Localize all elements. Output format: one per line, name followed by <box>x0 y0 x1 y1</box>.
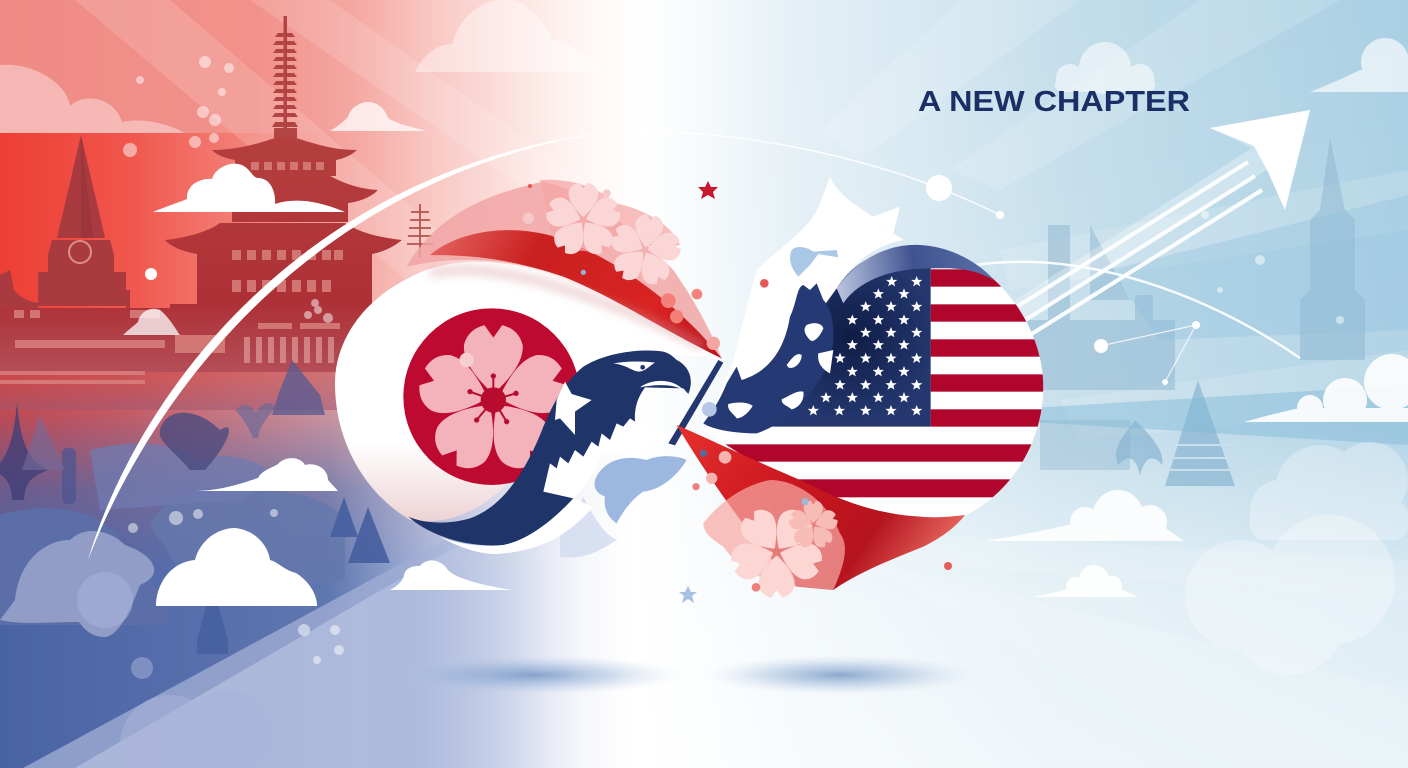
far small spire <box>407 204 433 258</box>
title: A NEW CHAPTER <box>918 86 1190 118</box>
left skyline: temples and pagoda <box>0 16 433 768</box>
diagonal divider <box>668 360 723 445</box>
ground shadows <box>385 655 975 695</box>
red top ribbon <box>430 230 722 358</box>
pink top ribbon <box>407 182 722 358</box>
clouds right <box>986 38 1408 675</box>
cherry blossom in sun <box>413 325 574 478</box>
america side map: white hokkaido and honshu (coordinates scaled 3x from origin 670,170) <box>703 177 903 433</box>
japan map fragment <box>595 456 687 523</box>
right skyline <box>1000 138 1408 486</box>
top blossoms <box>523 180 720 350</box>
japan side: flag, sun, eagle (coordinates scaled 3x from origin 330,170) <box>335 180 723 558</box>
white feathers <box>543 418 673 498</box>
blue fragments <box>790 247 838 277</box>
pagoda tiers <box>0 138 402 410</box>
red sun <box>403 308 580 485</box>
dots <box>123 56 1344 664</box>
small stars <box>679 181 718 603</box>
us flag stripes <box>703 243 1047 520</box>
lower red ribbon <box>677 425 965 590</box>
navy eagle and wave <box>408 350 691 545</box>
us canton <box>772 258 931 427</box>
pagoda spire <box>272 16 298 138</box>
purple silhouettes <box>0 360 325 504</box>
left clock tower <box>0 135 130 308</box>
curved arcs <box>88 130 1300 560</box>
pale foreground cloud blobs <box>77 572 275 768</box>
navy map of Japan <box>703 283 833 433</box>
fold highlight <box>837 245 994 303</box>
white star <box>555 382 592 435</box>
hills in lower left <box>0 443 345 637</box>
lower blossoms <box>692 289 845 619</box>
eagle face details <box>613 362 655 372</box>
white flag disc <box>335 262 721 521</box>
america side: flag and Japan map (coordinates scaled 3x from origin 670,170) <box>677 243 1047 619</box>
arrow: growth <box>1015 110 1310 335</box>
stars <box>808 276 922 415</box>
small red dots <box>528 184 952 570</box>
clouds left <box>0 0 605 606</box>
